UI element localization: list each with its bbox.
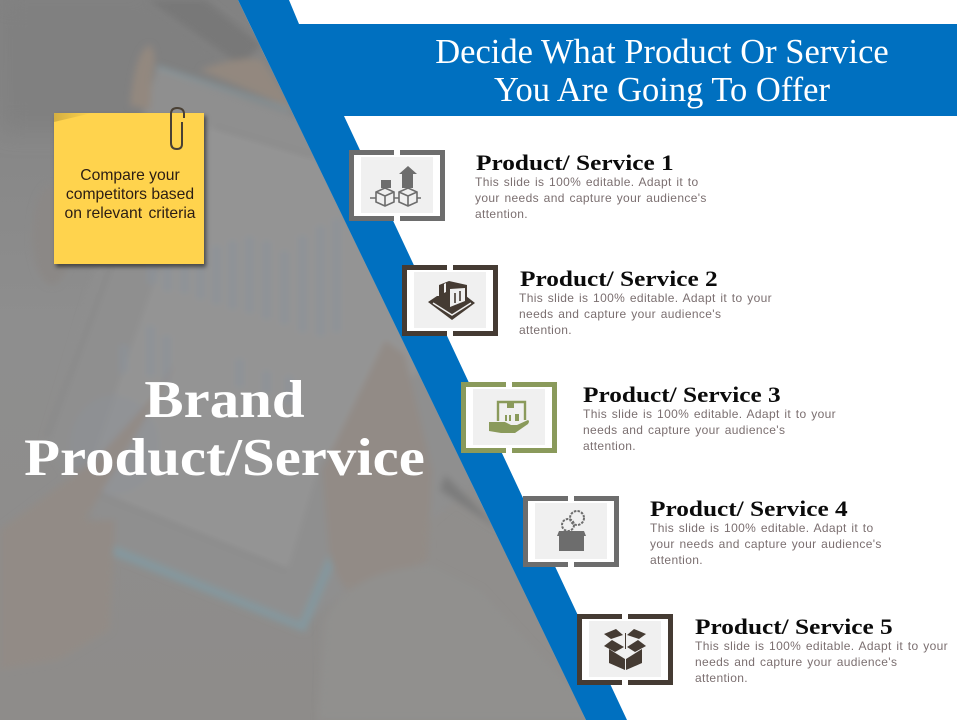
text: sticky note: [64, 167, 196, 222]
text 5: needs and capture your audience's: [695, 655, 897, 669]
background photo: tablet with charts and hands: [0, 0, 586, 720]
keyboard: [162, 3, 260, 58]
text 1: [475, 175, 707, 221]
text 2: This slide is 100% editable. Adapt it to your: [519, 291, 772, 305]
text 5: [695, 639, 948, 685]
right hand: [328, 344, 427, 584]
tablet body: [144, 70, 472, 485]
text 2: attention.: [519, 323, 572, 337]
icon frame 4: [523, 496, 619, 567]
text 4: your needs and capture your audience's: [650, 537, 882, 551]
text 1: your needs and capture your audience's: [475, 191, 707, 205]
text 3: attention.: [583, 439, 636, 453]
item 2: [402, 265, 772, 337]
text: sticky note: on relevant criteria: [64, 205, 196, 222]
top finger and hand: [130, 45, 155, 110]
heading 3: Product/ Service 3: [583, 382, 781, 407]
heading 4: Product/ Service 4: [650, 496, 848, 521]
icon frame 2: [402, 265, 498, 336]
chart bars: [120, 218, 341, 405]
sleeve: [581, 710, 583, 714]
text 1: attention.: [475, 207, 528, 221]
title: Decide What Product Or Service: [435, 33, 889, 71]
text 2: [519, 291, 772, 337]
icon frame 5: [577, 614, 673, 685]
icon frame 1: [349, 150, 445, 221]
text: sticky note: Compare your: [80, 167, 180, 184]
text 5: attention.: [695, 671, 748, 685]
left hand: [74, 404, 150, 538]
text 1: This slide is 100% editable. Adapt it to: [475, 175, 699, 189]
text 3: This slide is 100% editable. Adapt it to your: [583, 407, 836, 421]
item 1: [349, 150, 707, 221]
text 3: [583, 407, 836, 453]
text: sticky note: competitors based: [66, 186, 194, 203]
item 3: [461, 382, 836, 453]
text 4: attention.: [650, 553, 703, 567]
text 4: This slide is 100% editable. Adapt it to: [650, 521, 874, 535]
sticky note: [54, 113, 204, 264]
title: [435, 33, 889, 109]
heading: brand product/service: Product/Service: [24, 429, 425, 487]
heading 1: Product/ Service 1: [476, 150, 674, 175]
heading 2: Product/ Service 2: [520, 266, 718, 291]
heading: brand product/service: Brand: [144, 371, 305, 429]
text 2: needs and capture your audience's: [519, 307, 721, 321]
text 5: This slide is 100% editable. Adapt it to your: [695, 639, 948, 653]
title: You Are Going To Offer: [494, 71, 830, 109]
text 4: [650, 521, 882, 567]
heading 5: Product/ Service 5: [695, 614, 893, 639]
item 5: [577, 614, 948, 685]
item 4: [523, 496, 882, 567]
heading: brand product/service: [24, 371, 425, 487]
icon frame 3: [461, 382, 557, 453]
text 3: needs and capture your audience's: [583, 423, 785, 437]
